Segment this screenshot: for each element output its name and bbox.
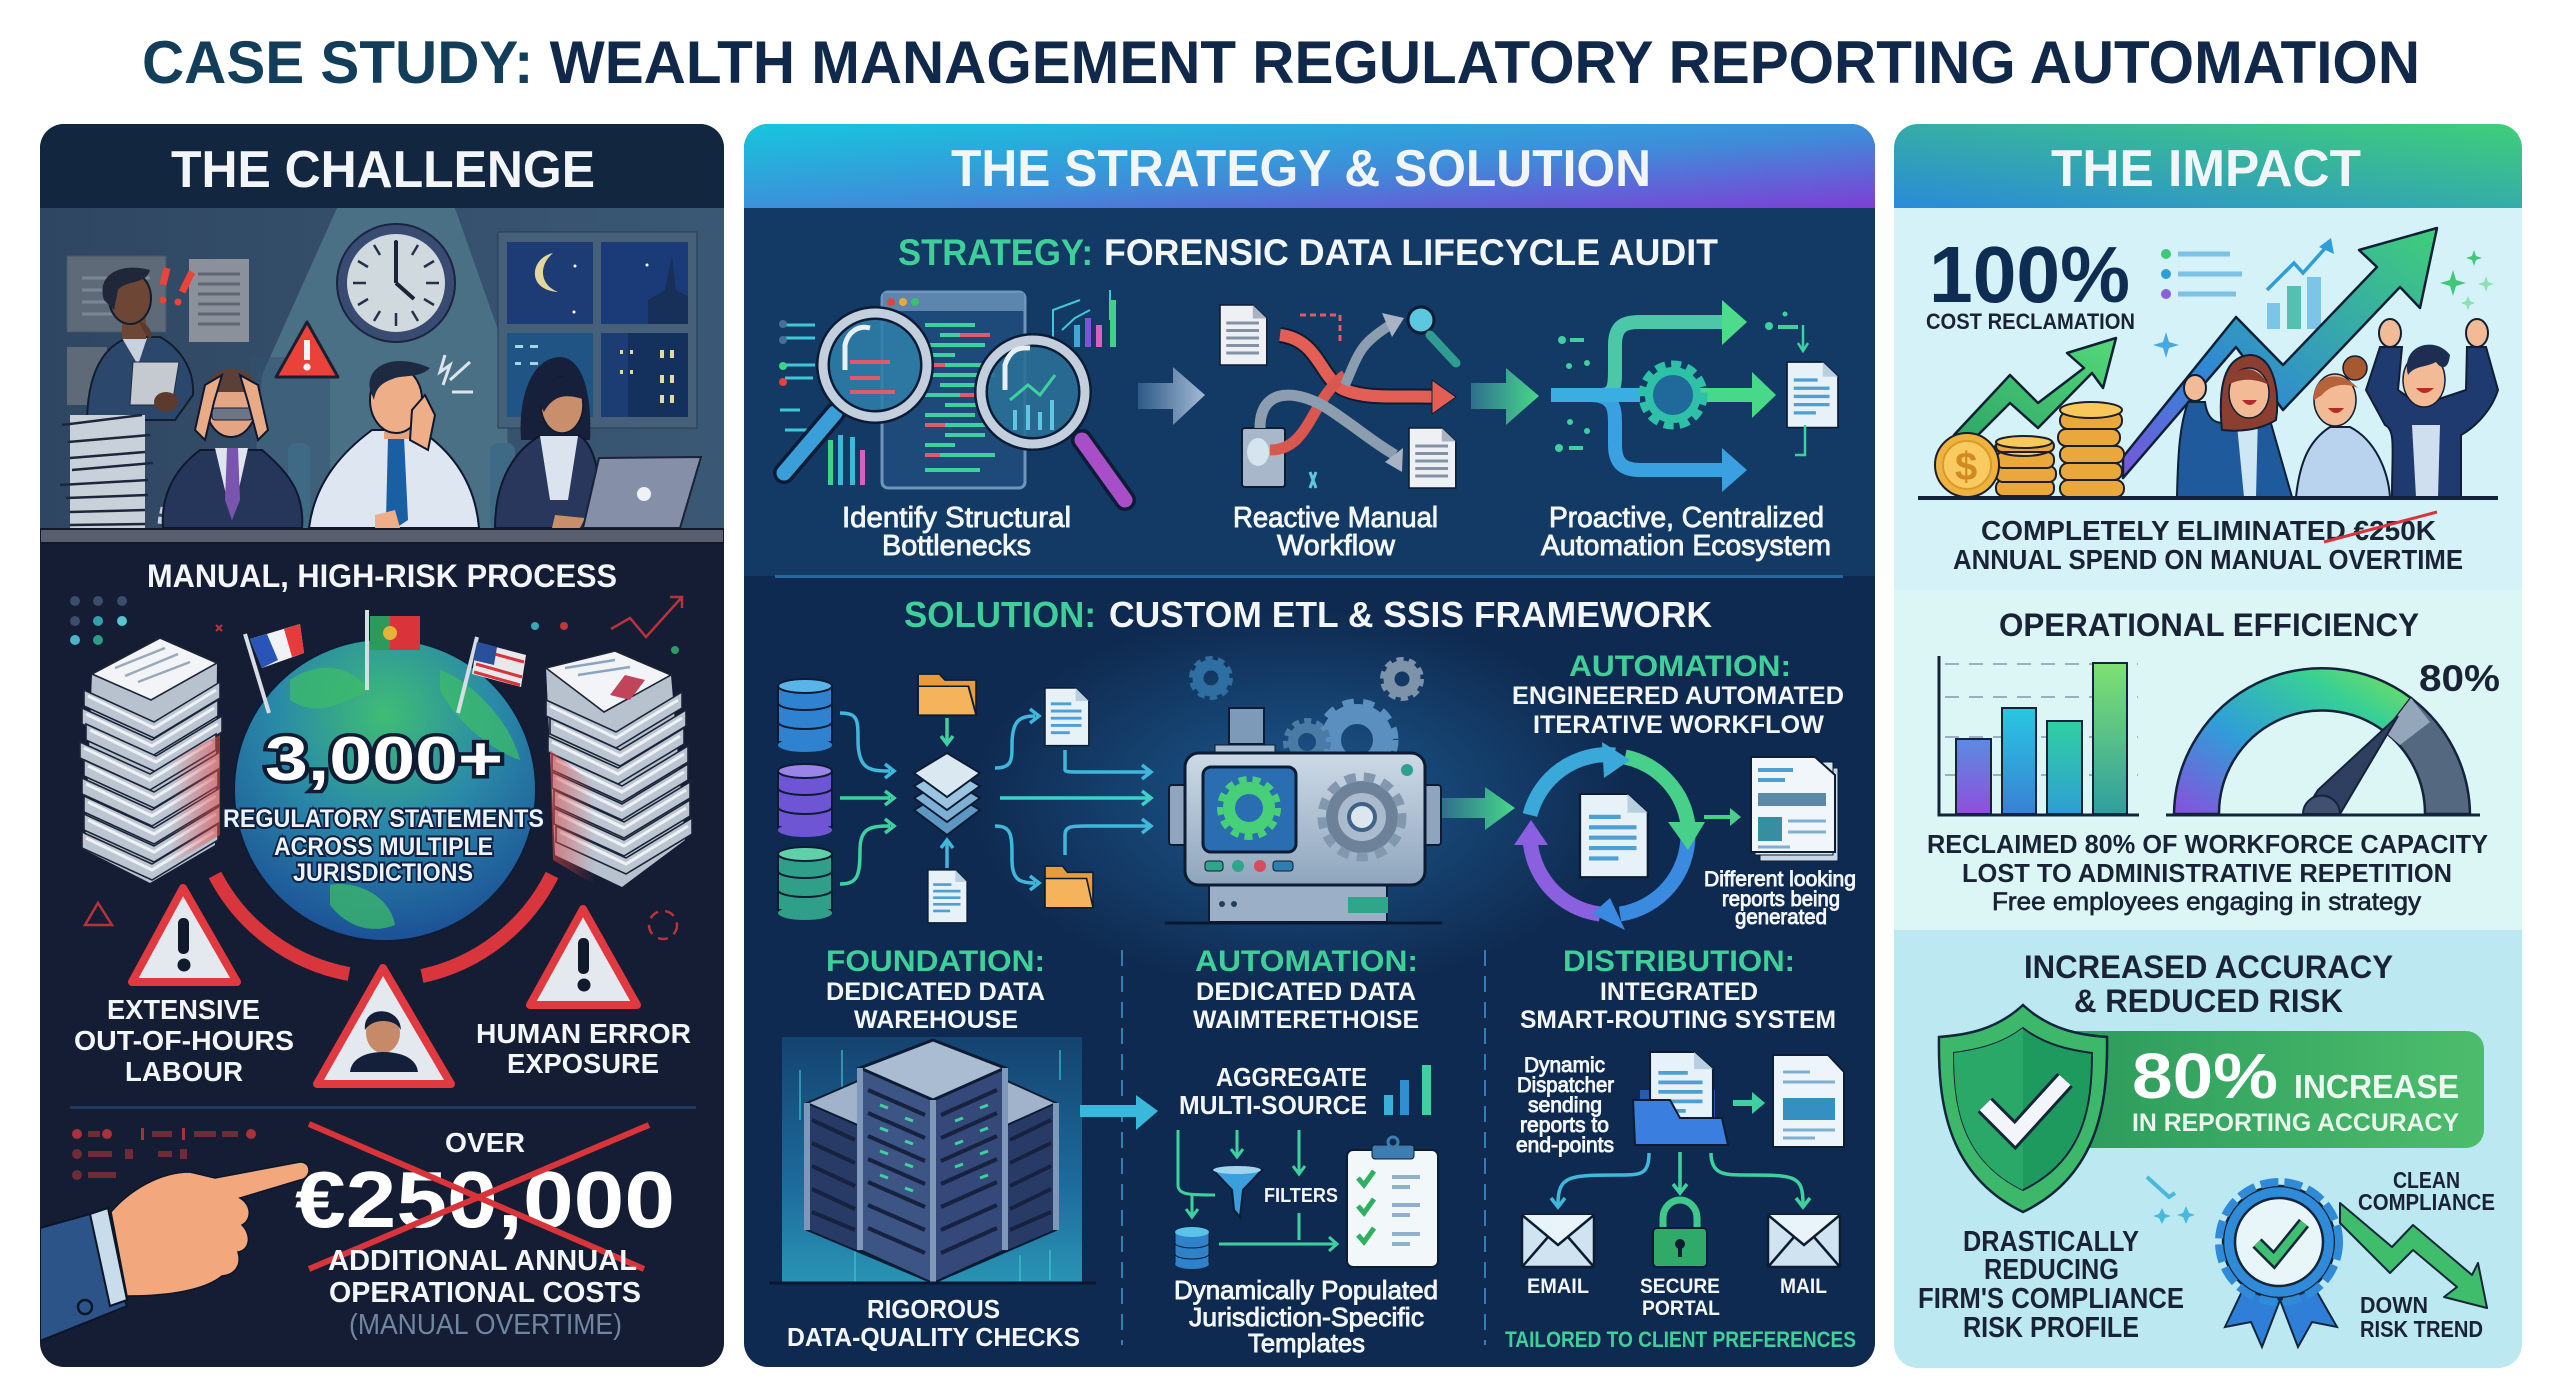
header band: the impact bbox=[1894, 124, 2522, 208]
label: automation engineered iterative workflow: AUTOMATION: bbox=[1569, 650, 1791, 683]
caption: identify structural bottlenecks: Identify Structural bbox=[842, 502, 1071, 534]
banner: 80 percent increase bbox=[2060, 1031, 2484, 1148]
label: distribution integrated smart-routing system: INTEGRATED bbox=[1600, 978, 1758, 1006]
label: clean compliance bbox=[2358, 1167, 2495, 1215]
decorative red marks bbox=[85, 597, 682, 939]
panel: the impact bbox=[1894, 124, 2522, 1368]
icon: document in cycle bbox=[1580, 794, 1648, 877]
figure: man holding head bbox=[163, 369, 310, 530]
label: foundation dedicated data warehouse: WAREHOUSE bbox=[854, 1006, 1018, 1034]
caption: dynamic dispatcher: Dispatcher bbox=[1517, 1074, 1614, 1097]
icon: iterative cycle bbox=[1514, 742, 1705, 930]
icon: clipboard checklist bbox=[1347, 1137, 1438, 1267]
icon: folder top bbox=[918, 674, 976, 715]
icon: layered data stack bbox=[914, 753, 980, 835]
section: increased accuracy and reduced risk bbox=[1894, 930, 2522, 1368]
column: foundation bbox=[769, 945, 1096, 1352]
label: filters: FILTERS bbox=[1264, 1185, 1338, 1207]
label: drastically reducing compliance risk: RISK PROFILE bbox=[1963, 1312, 2139, 1344]
stat: 3,000+ regulatory statements bbox=[223, 725, 544, 887]
heading: increased accuracy and reduced risk bbox=[2024, 949, 2393, 1019]
caption: identify structural bottlenecks bbox=[842, 502, 1071, 562]
caption: rigorous data-quality checks bbox=[787, 1294, 1080, 1352]
section: cost reclamation bbox=[1894, 208, 2522, 590]
icon: document bottom bbox=[928, 870, 967, 923]
text: reclaimed workforce capacity: RECLAIMED 80% OF WORKFORCE CAPACITY bbox=[1927, 829, 2488, 859]
icon: database green bbox=[778, 847, 832, 920]
heading: the strategy and solution: THE STRATEGY & SOLUTION bbox=[951, 140, 1651, 198]
icon: database purple bbox=[778, 764, 832, 837]
label: aggregate multi-source: MULTI-SOURCE bbox=[1179, 1090, 1367, 1120]
section: strategy bbox=[744, 208, 1875, 578]
arrow: machine to automation loop bbox=[1442, 787, 1515, 830]
caption: different looking reports being generated: reports being bbox=[1722, 888, 1840, 911]
icon: database blue bbox=[778, 679, 832, 752]
label: clean compliance: CLEAN bbox=[2393, 1167, 2460, 1193]
heading: strategy forensic data lifecycle audit bbox=[899, 239, 1718, 266]
label: down risk trend: DOWN bbox=[2360, 1292, 2428, 1318]
heading: increased accuracy and reduced risk: INCREASED ACCURACY bbox=[2024, 949, 2393, 985]
label: automation dedicated data: DEDICATED DATA bbox=[1196, 978, 1416, 1006]
icon: ETL machine bbox=[1165, 659, 1442, 923]
caption: dynamic dispatcher: Dynamic bbox=[1524, 1054, 1605, 1077]
caption: identify structural bottlenecks: Bottlenecks bbox=[882, 530, 1031, 562]
label: automation engineered iterative workflow bbox=[1512, 650, 1844, 739]
label: human error exposure: EXPOSURE bbox=[507, 1048, 659, 1079]
banner: 80 percent increase: INCREASE bbox=[2294, 1068, 2459, 1105]
icon: shield with check bbox=[1939, 1005, 2107, 1212]
icon: coin and stacks bbox=[1935, 402, 2124, 497]
icon: paper stack on desk bbox=[60, 414, 163, 528]
label: automation dedicated data bbox=[1193, 945, 1419, 1034]
heading: strategy forensic data lifecycle audit: FORENSIC DATA LIFECYCLE AUDIT bbox=[1104, 232, 1718, 273]
arrow: to reactive workflow bbox=[1138, 367, 1205, 425]
icon: folder bottom bbox=[1045, 866, 1093, 908]
labels: endpoints bbox=[1527, 1275, 1827, 1320]
header band: the challenge bbox=[40, 124, 724, 208]
label: distribution integrated smart-routing system: SMART-ROUTING SYSTEM bbox=[1520, 1006, 1836, 1034]
icon: small rising arrow bbox=[1954, 338, 2116, 435]
icon: funnel bbox=[1213, 1166, 1262, 1217]
icon: warning triangle left bbox=[132, 888, 237, 982]
icon: email envelope bbox=[1522, 1215, 1594, 1267]
icon: mini chart bbox=[1384, 1065, 1431, 1115]
label: human error exposure: HUMAN ERROR bbox=[476, 1018, 691, 1049]
arrow: warehouse to automation bbox=[1080, 1095, 1158, 1130]
cost block: over €250,000: ADDITIONAL ANNUAL bbox=[328, 1245, 637, 1277]
label: drastically reducing compliance risk: REDUCING bbox=[1984, 1254, 2119, 1286]
icon: small database bbox=[1175, 1227, 1209, 1269]
section: operational efficiency bbox=[1894, 590, 2522, 930]
text: reclaimed workforce capacity: LOST TO ADMINISTRATIVE REPETITION bbox=[1962, 858, 2452, 888]
label: drastically reducing compliance risk: FIRM'S COMPLIANCE bbox=[1918, 1283, 2184, 1315]
icon: mini growth chart bbox=[2267, 238, 2334, 329]
label: aggregate multi-source bbox=[1179, 1062, 1367, 1120]
icon: sparkles bbox=[2153, 250, 2494, 358]
heading: operational efficiency: OPERATIONAL EFFICIENCY bbox=[1999, 607, 2419, 643]
icon: bullet list bbox=[2161, 249, 2242, 299]
cost block: over €250,000: €250,000 bbox=[295, 1155, 675, 1244]
label: completely eliminated 250k overtime: ANNUAL SPEND ON MANUAL OVERTIME bbox=[1953, 544, 2463, 575]
icon: compliance badge bbox=[2219, 1182, 2339, 1347]
heading: solution custom etl and ssis framework: SOLUTION: bbox=[904, 594, 1096, 635]
arrows: filter flows bbox=[1178, 1130, 1337, 1251]
banner: 80 percent increase: 80% bbox=[2132, 1040, 2278, 1112]
label: foundation dedicated data warehouse: DEDICATED DATA bbox=[826, 978, 1045, 1006]
figure: man in white shirt bbox=[309, 355, 479, 528]
caption: proactive centralized automation ecosystem bbox=[1541, 502, 1831, 562]
stat: 100 percent cost reclamation: COST RECLAMATION bbox=[1926, 309, 2135, 334]
caption: dynamic dispatcher: end-points bbox=[1516, 1134, 1614, 1157]
icon: tangled manual workflow bbox=[1220, 305, 1456, 488]
figure: woman at laptop bbox=[490, 357, 701, 530]
cost block: over €250,000: (MANUAL OVERTIME) bbox=[349, 1309, 622, 1341]
heading: increased accuracy and reduced risk: & REDUCED RISK bbox=[2074, 983, 2343, 1019]
icon: warning triangle with person bbox=[317, 968, 451, 1084]
heading: solution custom etl and ssis framework: CUSTOM ETL & SSIS FRAMEWORK bbox=[1109, 594, 1712, 635]
illustration: stressed office workers at night bbox=[40, 208, 724, 543]
icon: secure lock bbox=[1653, 1200, 1707, 1267]
arrow: cycle to reports bbox=[1704, 808, 1741, 826]
gauge: 80 percent bbox=[2166, 668, 2480, 815]
icon: warning triangle right bbox=[530, 909, 637, 1005]
caption: dynamic dispatcher: reports to bbox=[1520, 1114, 1609, 1137]
icon: server towers bbox=[769, 1037, 1096, 1283]
panel: the challenge bbox=[40, 124, 724, 1367]
heading: strategy forensic data lifecycle audit: STRATEGY: bbox=[898, 232, 1093, 273]
icon: pointing hand bbox=[40, 1162, 309, 1341]
desk bbox=[40, 529, 724, 543]
label: automation engineered iterative workflow: ITERATIVE WORKFLOW bbox=[1533, 711, 1824, 739]
banner: 80 percent increase: IN REPORTING ACCURACY bbox=[2132, 1109, 2459, 1137]
label: down risk trend bbox=[2360, 1292, 2483, 1342]
stat: 100 percent cost reclamation: 100% bbox=[1929, 230, 2130, 319]
label: automation dedicated data: WAIMTERETHOISE bbox=[1193, 1006, 1419, 1034]
arrows: routing to endpoints bbox=[1551, 1152, 1810, 1207]
bar chart bbox=[1939, 656, 2139, 815]
caption: dynamically populated templates: Jurisdiction-Specific bbox=[1189, 1302, 1424, 1332]
stat: 3,000+ regulatory statements: 3,000+ bbox=[265, 725, 503, 794]
label: human error exposure bbox=[478, 1024, 690, 1074]
currency symbol on coin: $ bbox=[1955, 445, 1977, 489]
header band: strategy and solution bbox=[744, 124, 1875, 208]
caption: rigorous data-quality checks: DATA-QUALITY CHECKS bbox=[787, 1322, 1080, 1352]
icon: globe bbox=[234, 639, 536, 941]
label: drastically reducing compliance risk: DRASTICALLY bbox=[1963, 1226, 2139, 1258]
caption: reactive manual workflow bbox=[1233, 502, 1438, 562]
decorative network dots bbox=[70, 596, 127, 645]
caption: dynamically populated templates: Dynamically Populated bbox=[1174, 1275, 1438, 1305]
stat: 3,000+ regulatory statements: REGULATORY STATEMENTS bbox=[223, 805, 544, 833]
caption: different looking reports being generated: generated bbox=[1735, 906, 1827, 929]
icon: left paper stack bbox=[80, 638, 222, 883]
section: solution bbox=[769, 594, 1856, 1358]
caption: different looking reports being generated: Different looking bbox=[1704, 868, 1856, 891]
caption: dynamically populated templates: Templates bbox=[1248, 1328, 1365, 1358]
icon: folder with document bbox=[1633, 1052, 1728, 1145]
heading: the impact: THE IMPACT bbox=[2051, 140, 2361, 198]
icon: code window with magnifiers bbox=[779, 290, 1125, 500]
label: distribution integrated smart-routing system bbox=[1520, 945, 1836, 1034]
caption: rigorous data-quality checks: RIGOROUS bbox=[867, 1294, 1000, 1324]
icon: night window bbox=[498, 232, 697, 428]
arrows: data flow into machine bbox=[840, 709, 1151, 890]
caption: tailored to client preferences: TAILORED TO CLIENT PREFERENCES bbox=[1505, 1327, 1856, 1352]
label: completely eliminated 250k overtime: COMPLETELY ELIMINATED €250K bbox=[1981, 515, 2436, 546]
label: extensive out-of-hours labour: LABOUR bbox=[125, 1056, 243, 1087]
heading: the challenge: THE CHALLENGE bbox=[171, 141, 595, 199]
icon: big rising arrow bbox=[2123, 228, 2437, 478]
label: automation engineered iterative workflow: ENGINEERED AUTOMATED bbox=[1512, 682, 1844, 710]
gauge value: 80% bbox=[2419, 658, 2500, 699]
cost block: over €250,000 bbox=[295, 1124, 675, 1341]
icon: down risk arrow bbox=[2340, 1203, 2487, 1308]
cost block: over €250,000: OPERATIONAL COSTS bbox=[329, 1277, 641, 1309]
caption: reactive manual workflow: Reactive Manual bbox=[1233, 502, 1438, 534]
arrow: to automation ecosystem bbox=[1471, 368, 1539, 425]
figure: cheering man bbox=[2366, 319, 2498, 497]
label: foundation dedicated data warehouse bbox=[826, 945, 1045, 1034]
text: reclaimed workforce capacity: Free employees engaging in strategy bbox=[1992, 888, 2422, 916]
label: automation dedicated data: AUTOMATION: bbox=[1195, 945, 1418, 978]
caption: dynamic dispatcher: sending bbox=[1528, 1094, 1602, 1117]
caption: different looking reports being generated bbox=[1704, 868, 1856, 929]
icon: routed document bbox=[1773, 1055, 1844, 1147]
caption: proactive centralized automation ecosystem: Automation Ecosystem bbox=[1541, 530, 1831, 562]
icon: wall clock bbox=[337, 224, 455, 342]
labels: endpoints: SECURE bbox=[1640, 1275, 1720, 1298]
icon: proactive automation flow bbox=[1551, 300, 1838, 492]
figure: worried standing man bbox=[87, 268, 193, 420]
title: CASE STUDY: WEALTH MANAGEMENT REGULATORY REPORTING AUTOMATION bbox=[142, 29, 2420, 96]
decorative accents bbox=[2147, 1177, 2195, 1224]
label: aggregate multi-source: AGGREGATE bbox=[1216, 1062, 1367, 1092]
icon: mail envelope bbox=[1768, 1215, 1840, 1267]
label: clean compliance: COMPLIANCE bbox=[2358, 1189, 2495, 1215]
caption: proactive centralized automation ecosystem: Proactive, Centralized bbox=[1549, 502, 1824, 534]
text: reclaimed workforce capacity bbox=[1927, 829, 2488, 916]
label: foundation dedicated data warehouse: FOUNDATION: bbox=[826, 945, 1045, 978]
panel: the strategy and solution bbox=[744, 124, 1875, 1367]
label: drastically reducing compliance risk bbox=[1918, 1226, 2184, 1344]
caption: reactive manual workflow: Workflow bbox=[1277, 530, 1396, 562]
labels: endpoints: EMAIL bbox=[1527, 1275, 1589, 1298]
cost block: over €250,000: OVER bbox=[445, 1127, 525, 1158]
decorative coloured dots bbox=[216, 622, 679, 654]
label: extensive out-of-hours labour: EXTENSIVE bbox=[107, 994, 260, 1025]
icon: document top bbox=[1045, 688, 1089, 746]
icon: right paper stack bbox=[546, 651, 692, 887]
labels: endpoints: MAIL bbox=[1780, 1275, 1827, 1298]
caption: dynamically populated templates bbox=[1174, 1275, 1438, 1358]
arrow: folder to document bbox=[1733, 1092, 1765, 1114]
icon: flags bbox=[245, 610, 526, 713]
decorative red data dots bbox=[72, 1128, 256, 1180]
figure: smiling woman middle bbox=[2296, 356, 2390, 497]
figure: cheering woman left bbox=[2177, 355, 2292, 497]
column: automation bbox=[1174, 945, 1438, 1358]
labels: endpoints: PORTAL bbox=[1642, 1297, 1720, 1320]
label: extensive out-of-hours labour bbox=[75, 1000, 293, 1082]
label: distribution integrated smart-routing system: DISTRIBUTION: bbox=[1563, 945, 1795, 978]
icon: warning sign bbox=[276, 322, 338, 377]
icon: generated reports bbox=[1751, 757, 1838, 861]
heading: manual, high-risk process: MANUAL, HIGH-RISK PROCESS bbox=[147, 558, 617, 594]
label: extensive out-of-hours labour: OUT-OF-HOURS bbox=[74, 1025, 294, 1056]
column: distribution bbox=[1505, 945, 1856, 1352]
caption: dynamic dispatcher bbox=[1516, 1054, 1614, 1157]
stat: 3,000+ regulatory statements: JURISDICTIONS bbox=[293, 859, 473, 887]
label: completely eliminated 250k overtime bbox=[1953, 512, 2463, 575]
icon: red arc around globe bbox=[215, 875, 552, 976]
label: down risk trend: RISK TREND bbox=[2360, 1316, 2483, 1342]
stat: 3,000+ regulatory statements: ACROSS MULTIPLE bbox=[274, 833, 493, 861]
